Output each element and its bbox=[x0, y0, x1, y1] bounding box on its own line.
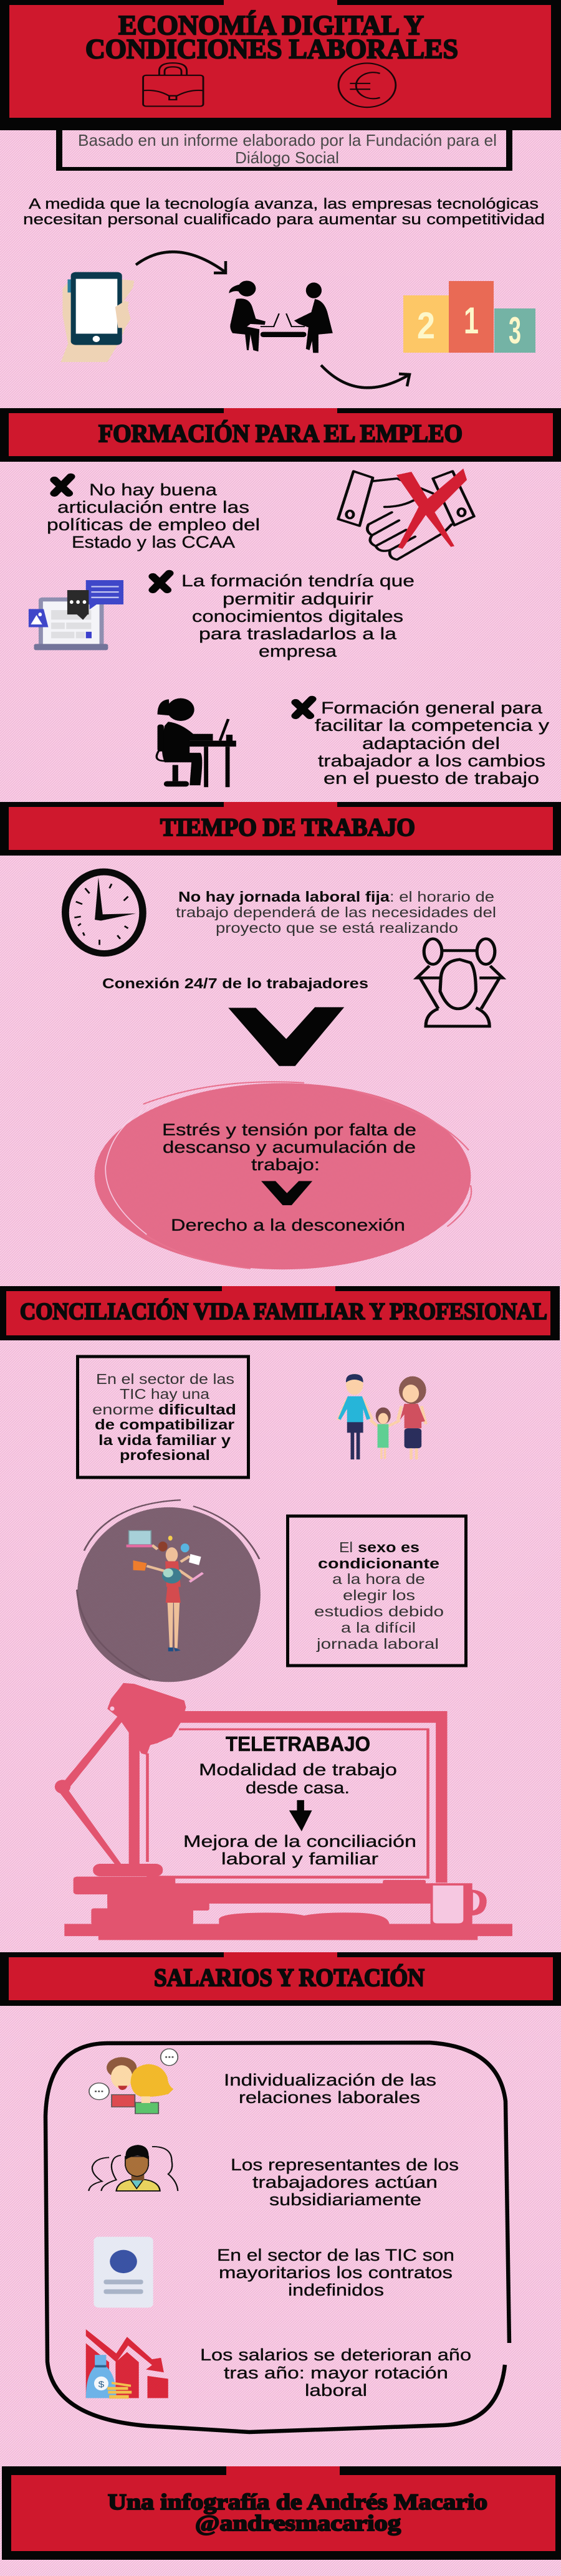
panel: multitasking woman in circle bbox=[77, 1500, 261, 1682]
panel: teletrabajo desk illustration: Modalidad de trabajo bbox=[199, 1760, 397, 1779]
icon: phone in hand bbox=[61, 272, 134, 362]
text: formación general: facilitar la competencia y bbox=[315, 716, 550, 735]
text: conocimientos digitales: permitir adquirir bbox=[223, 589, 373, 608]
panel: teletrabajo desk illustration: laboral y familiar bbox=[221, 1849, 378, 1868]
podium chart: 3 bbox=[509, 310, 521, 351]
icon: euro bbox=[338, 63, 396, 107]
text box: sexo: El bbox=[339, 1539, 353, 1555]
text: jornada laboral: trabajo dependerá de las necesidades del bbox=[176, 904, 496, 920]
footer banner: Una infografía de Andrés Macario bbox=[108, 2489, 487, 2514]
text box: sexo: estudios debido bbox=[314, 1603, 444, 1620]
text box: dificultad: TIC hay una bbox=[120, 1386, 209, 1402]
arrow: down bbox=[289, 1800, 312, 1831]
text: conocimientos digitales: empresa bbox=[259, 642, 337, 661]
panel: teletrabajo desk illustration: Mejora de la conciliación bbox=[183, 1832, 416, 1851]
text: contratos: indefinidos bbox=[288, 2281, 384, 2299]
section heading: tiempo de trabajo bbox=[0, 802, 561, 856]
header banner bbox=[0, 0, 561, 130]
panel: teletrabajo desk illustration bbox=[55, 1683, 512, 1940]
text: representantes: trabajadores actúan bbox=[252, 2173, 438, 2192]
text: articulación: articulación entre las bbox=[57, 498, 249, 517]
text: formación general: Formación general para bbox=[321, 699, 543, 717]
text: conocimientos digitales: conocimientos digitales bbox=[192, 607, 403, 626]
text: representantes: subsidiariamente bbox=[269, 2190, 421, 2209]
text: individualización bbox=[224, 2071, 436, 2107]
podium chart: 2 bbox=[417, 305, 435, 346]
icon: falling salaries chart: $ bbox=[98, 2380, 105, 2390]
text box: sexo: a la hora de bbox=[332, 1571, 425, 1587]
callout: stress ellipse: descanso y acumulación de bbox=[163, 1138, 416, 1157]
text box: sexo bbox=[288, 1516, 466, 1666]
text: contratos: En el sector de las TIC son bbox=[217, 2246, 454, 2264]
text: articulación: Estado y las CCAA bbox=[72, 533, 235, 551]
text box: dificultad bbox=[77, 1357, 248, 1477]
callout: stress ellipse bbox=[95, 1082, 471, 1269]
section heading: conciliación bbox=[0, 1286, 560, 1340]
text: formación general: trabajador a los cambios bbox=[318, 751, 545, 770]
icon: cross 3 bbox=[295, 699, 312, 716]
text box: sexo: sexo es bbox=[358, 1539, 420, 1555]
section heading: formación bbox=[0, 408, 561, 462]
text: salarios bbox=[200, 2345, 471, 2400]
icon: cross 2 bbox=[153, 573, 170, 590]
heading: teletrabajo: TELETRABAJO bbox=[226, 1732, 370, 1755]
text: jornada laboral: No hay jornada laboral fija bbox=[178, 889, 390, 905]
text: contratos bbox=[217, 2246, 454, 2299]
section heading: salarios bbox=[0, 1952, 561, 2006]
icon: people working at table bbox=[229, 280, 333, 353]
intro text bbox=[23, 196, 545, 228]
text box: dificultad: enorme bbox=[92, 1401, 154, 1418]
icon: worker representatives bbox=[89, 2145, 178, 2191]
callout: stress ellipse: Estrés y tensión por falta de bbox=[162, 1120, 416, 1139]
text box: dificultad: dificultad bbox=[158, 1401, 236, 1418]
source box: Diálogo Social bbox=[235, 148, 339, 167]
text box: dificultad: la vida familiar y bbox=[98, 1432, 231, 1448]
text: contratos: mayoritarios los contratos bbox=[219, 2263, 453, 2282]
text: articulación: No hay buena bbox=[89, 480, 218, 499]
title: CONDICIONES LABORALES bbox=[85, 34, 458, 64]
section heading: salarios: SALARIOS Y ROTACIÓN bbox=[154, 1963, 424, 1992]
text box: sexo: elegir los bbox=[343, 1587, 415, 1603]
text: representantes: Los representantes de los bbox=[231, 2155, 459, 2174]
text: conexión: Conexión 24/7 de lo trabajadores bbox=[102, 975, 368, 991]
footer banner bbox=[2, 2466, 561, 2560]
arrow: small chevron bbox=[261, 1181, 312, 1205]
section heading: formación: FORMACIÓN PARA EL EMPLEO bbox=[98, 419, 463, 447]
text: formación general: en el puesto de trabajo bbox=[324, 769, 539, 788]
callout: stress ellipse: trabajo: bbox=[251, 1155, 320, 1174]
text: jornada laboral: proyecto que se está realizando bbox=[216, 920, 458, 936]
text: formación general bbox=[315, 699, 550, 788]
panel: rounded hand-drawn frame bbox=[46, 2043, 509, 2432]
text: articulación: políticas de empleo del bbox=[47, 515, 260, 534]
text box: sexo: jornada laboral bbox=[316, 1636, 439, 1652]
text box: dificultad: En el sector de las bbox=[96, 1371, 234, 1387]
source box bbox=[56, 130, 512, 171]
text box: sexo: condicionante bbox=[318, 1555, 439, 1572]
title: ECONOMÍA DIGITAL Y bbox=[118, 10, 424, 41]
icon: clock bbox=[62, 869, 145, 955]
podium chart: 1 bbox=[464, 300, 479, 341]
icon: cross 1 bbox=[54, 477, 71, 494]
icon: briefcase bbox=[143, 63, 203, 107]
icon: woman at desk bbox=[156, 699, 236, 787]
title bbox=[85, 10, 458, 64]
text: conocimientos digitales: para trasladarlos a la bbox=[199, 624, 397, 643]
panel: teletrabajo desk illustration: desde casa. bbox=[246, 1778, 350, 1797]
icon: falling salaries chart bbox=[86, 2329, 168, 2398]
text box: dificultad: profesional bbox=[120, 1447, 210, 1463]
arrow: large chevron bbox=[228, 1007, 344, 1066]
icon: women talking bbox=[89, 2049, 178, 2114]
text: jornada laboral bbox=[176, 889, 496, 936]
text: salarios: Los salarios se deterioran año bbox=[200, 2345, 471, 2364]
text: jornada laboral: : el horario de bbox=[390, 889, 494, 905]
intro text: A medida que la tecnología avanza, las empresas tecnológicas bbox=[29, 196, 539, 212]
text: articulación bbox=[47, 480, 260, 551]
icon: laptop with chat bubbles bbox=[29, 580, 123, 650]
intro text: necesitan personal cualificado para aumentar su competitividad bbox=[23, 211, 545, 228]
podium chart bbox=[403, 281, 535, 353]
icon: family bbox=[338, 1374, 426, 1459]
icon: crossed handshake bbox=[338, 469, 474, 560]
icon: contract document bbox=[94, 2237, 153, 2307]
text: conocimientos digitales bbox=[181, 571, 415, 661]
arrow: team to podium bbox=[321, 365, 410, 388]
source box: Basado en un informe elaborado por la Fundación para el bbox=[78, 131, 497, 150]
callout: stress ellipse: Derecho a la desconexión bbox=[171, 1216, 405, 1234]
section heading: tiempo de trabajo: TIEMPO DE TRABAJO bbox=[160, 813, 415, 841]
arrow: phone to team bbox=[136, 252, 226, 273]
text: individualización: relaciones laborales bbox=[239, 2088, 420, 2107]
text: formación general: adaptación del bbox=[362, 734, 500, 753]
icon: connected people outline bbox=[417, 939, 502, 1026]
text box: sexo: a la difícil bbox=[341, 1620, 416, 1636]
text: salarios: tras año: mayor rotación bbox=[224, 2364, 448, 2382]
text: conocimientos digitales: La formación tendría que bbox=[181, 571, 415, 590]
text box: dificultad: de compatibilizar bbox=[95, 1416, 234, 1433]
text: representantes bbox=[231, 2155, 459, 2209]
footer banner: @andresmacariog bbox=[195, 2511, 401, 2535]
text: individualización: Individualización de las bbox=[224, 2071, 436, 2089]
text: salarios: laboral bbox=[305, 2381, 367, 2400]
